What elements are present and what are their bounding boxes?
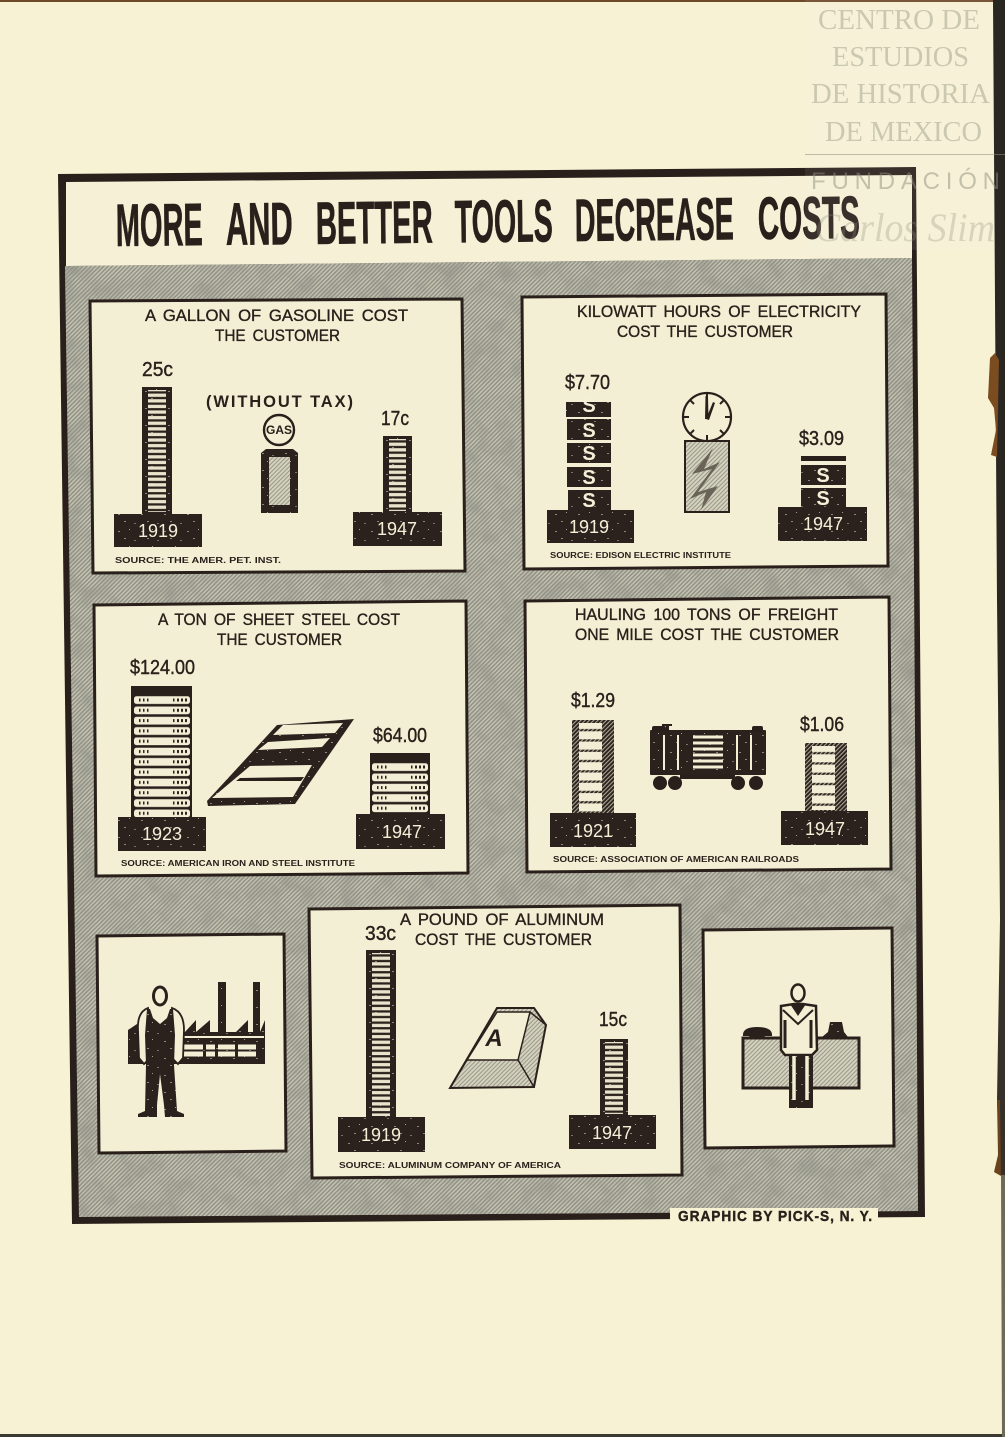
gasoline source: SOURCE: THE AMER. PET. INST. bbox=[115, 556, 281, 565]
1947 electricity stack: $3.09 bbox=[799, 428, 844, 450]
bottom page edge bbox=[0, 1434, 1005, 1437]
title: MORE bbox=[115, 191, 203, 259]
infographic page: COSTS bbox=[757, 184, 860, 252]
icon: aluminum ingot bbox=[450, 1008, 546, 1088]
1919 aluminum bar bbox=[338, 923, 425, 1152]
freight heading: HAULING 100 TONS OF FREIGHT bbox=[575, 606, 838, 624]
main frame bbox=[58, 167, 925, 1224]
icon: gas pump: GAS bbox=[266, 423, 292, 437]
title: TOOLS bbox=[454, 187, 553, 255]
icon: gas pump bbox=[261, 415, 298, 513]
credit strip bbox=[670, 1208, 878, 1225]
icon: worker in overalls bbox=[138, 987, 184, 1117]
electricity heading: COST THE CUSTOMER bbox=[617, 323, 793, 341]
halftone grey background bbox=[65, 258, 918, 1217]
watermark: Centro de Estudios de Historia de Mexico: FUNDACIÓN bbox=[811, 168, 1000, 195]
title band bbox=[66, 175, 912, 266]
panel: electricity bbox=[522, 294, 888, 569]
icon: freight car bbox=[650, 724, 766, 790]
freight heading bbox=[575, 606, 839, 644]
1923 steel stack: 1923 bbox=[142, 824, 182, 844]
1921 freight bar bbox=[550, 690, 636, 847]
icon: man in suit bbox=[781, 984, 817, 1108]
icon: aluminum ingot: A bbox=[484, 1025, 503, 1052]
1947 gasoline bar: 1947 bbox=[377, 519, 417, 539]
1919 gasoline bar bbox=[114, 359, 202, 547]
icon: factory bbox=[128, 982, 265, 1064]
1947 electricity stack: S bbox=[816, 465, 830, 487]
1919 gasoline bar: 25c bbox=[142, 359, 173, 381]
steel heading: A TON OF SHEET STEEL COST bbox=[158, 611, 400, 629]
1947 freight bar bbox=[781, 714, 868, 845]
icon: clock and lightning meter bbox=[683, 393, 731, 512]
1947 freight bar: $1.06 bbox=[800, 714, 844, 736]
icon: desk with phone and inkwell bbox=[743, 1022, 859, 1088]
1919 aluminum bar: 33c bbox=[365, 923, 396, 945]
steel source: SOURCE: AMERICAN IRON AND STEEL INSTITUTE bbox=[121, 859, 356, 868]
title bbox=[115, 184, 860, 259]
1947 aluminum bar bbox=[569, 1009, 656, 1149]
watermark: Centro de Estudios de Historia de Mexico: DE MEXICO bbox=[825, 116, 982, 148]
watermark: Centro de Estudios de Historia de Mexico: ESTUDIOS bbox=[832, 41, 969, 73]
icon: steel sheet bbox=[207, 719, 354, 806]
panel: worker and factory bbox=[97, 934, 286, 1153]
aluminum source: SOURCE: ALUMINUM COMPANY OF AMERICA bbox=[339, 1161, 561, 1170]
1947 electricity stack: 1947 bbox=[803, 514, 843, 534]
1947 electricity stack bbox=[778, 428, 867, 541]
title: DECREASE bbox=[574, 185, 734, 254]
steel heading: THE CUSTOMER bbox=[217, 631, 342, 649]
credit line: GRAPHIC BY PICK-S, N. Y. bbox=[678, 1209, 873, 1225]
gasoline heading: A GALLON OF GASOLINE COST bbox=[145, 307, 408, 325]
panel: gasoline bbox=[90, 299, 465, 573]
gasoline heading bbox=[145, 307, 408, 345]
1947 steel stack: $64.00 bbox=[373, 725, 427, 747]
1947 electricity stack: S bbox=[816, 488, 830, 510]
1919 electricity stack: S bbox=[582, 443, 596, 465]
1947 aluminum bar: 15c bbox=[599, 1009, 627, 1031]
top page edge bbox=[0, 0, 1005, 2]
1919 electricity stack: S bbox=[582, 395, 596, 417]
1947 gasoline bar bbox=[353, 408, 442, 546]
gasoline heading: THE CUSTOMER bbox=[215, 327, 340, 345]
1919 electricity stack: S bbox=[582, 420, 596, 442]
1947 aluminum bar: 1947 bbox=[592, 1123, 632, 1143]
1947 freight bar: 1947 bbox=[805, 819, 845, 839]
electricity heading bbox=[577, 303, 861, 341]
1947 steel stack: 1947 bbox=[382, 822, 422, 842]
1919 electricity stack: $7.70 bbox=[565, 372, 610, 394]
panel: freight bbox=[525, 597, 891, 872]
1923 steel stack bbox=[118, 657, 206, 851]
aluminum heading: A POUND OF ALUMINUM bbox=[400, 911, 604, 929]
steel heading bbox=[158, 611, 400, 649]
watermark: Centro de Estudios de Historia de Mexico: DE HISTORIA bbox=[811, 78, 990, 110]
watermark: Centro de Estudios de Historia de Mexico bbox=[805, 0, 1005, 250]
right page edge with stains bbox=[988, 0, 1005, 1437]
electricity source: SOURCE: EDISON ELECTRIC INSTITUTE bbox=[550, 551, 732, 560]
title: AND bbox=[225, 190, 293, 258]
halftone mottling bbox=[60, 255, 925, 1220]
1921 freight bar: 1921 bbox=[573, 821, 613, 841]
1923 steel stack: $124.00 bbox=[130, 657, 195, 679]
watermark: Centro de Estudios de Historia de Mexico: Carlos Slim bbox=[815, 205, 995, 250]
panel: sheet steel bbox=[94, 601, 468, 876]
1919 electricity stack bbox=[547, 372, 634, 543]
aluminum heading bbox=[400, 911, 604, 949]
1919 electricity stack: 1919 bbox=[569, 517, 609, 537]
1947 gasoline bar: 17c bbox=[381, 408, 409, 430]
1947 steel stack bbox=[356, 725, 445, 849]
freight source: SOURCE: ASSOCIATION OF AMERICAN RAILROADS bbox=[553, 855, 800, 864]
title: BETTER bbox=[315, 189, 433, 257]
panel: office worker bbox=[703, 928, 894, 1148]
panel: aluminum bbox=[309, 905, 682, 1178]
electricity heading: KILOWATT HOURS OF ELECTRICITY bbox=[577, 303, 861, 321]
aluminum heading: COST THE CUSTOMER bbox=[415, 931, 592, 949]
freight heading: ONE MILE COST THE CUSTOMER bbox=[575, 626, 839, 644]
1919 gasoline bar: 1919 bbox=[138, 521, 178, 541]
1921 freight bar: $1.29 bbox=[571, 690, 615, 712]
1919 electricity stack: S bbox=[582, 467, 596, 489]
1919 aluminum bar: 1919 bbox=[361, 1125, 401, 1145]
1919 electricity stack: S bbox=[582, 490, 596, 512]
watermark: Centro de Estudios de Historia de Mexico: CENTRO DE bbox=[818, 4, 980, 36]
without tax note: (WITHOUT TAX) bbox=[206, 393, 355, 411]
